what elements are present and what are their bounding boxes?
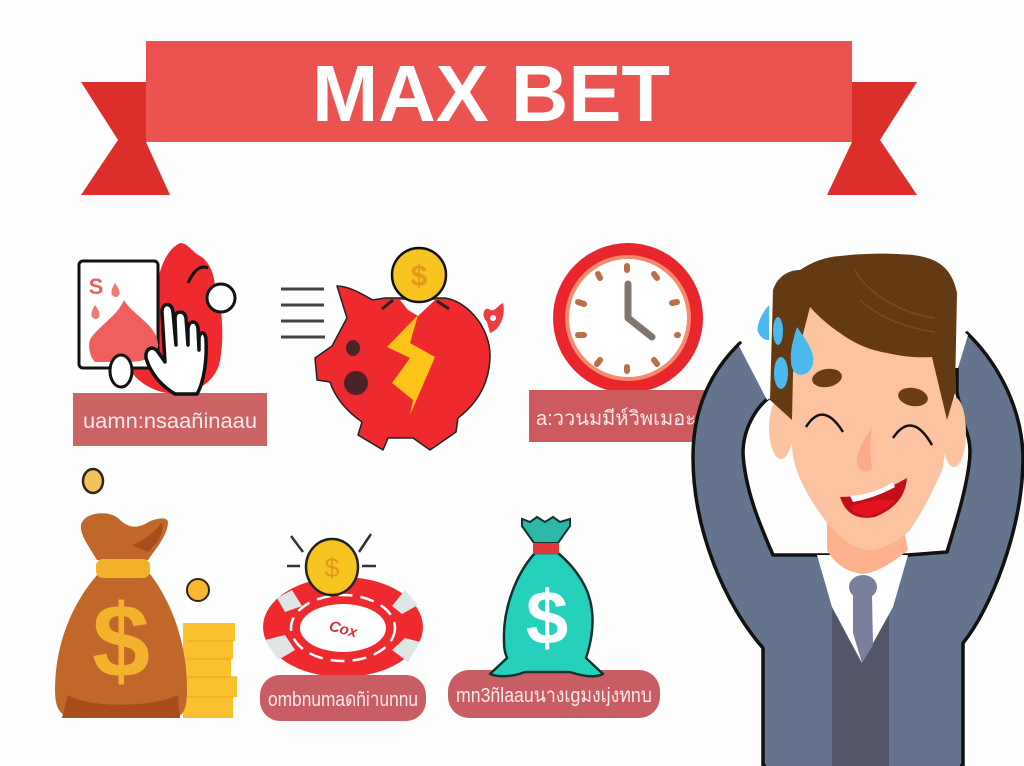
mouth bbox=[840, 478, 907, 518]
icon: broken piggy bank bbox=[315, 248, 504, 450]
label 3 bbox=[260, 675, 426, 721]
icon: clock bbox=[553, 243, 703, 393]
label 4: mn3ñlaauนางเgมงเjงทnบ bbox=[456, 685, 652, 707]
ears bbox=[769, 397, 966, 467]
icon: speed lines bbox=[281, 289, 325, 337]
icon: coin stack bbox=[183, 623, 237, 718]
title banner bbox=[81, 41, 917, 195]
label 1: uamn:nsaañinaau bbox=[83, 410, 257, 433]
icon: brown money bag with coins: $ bbox=[92, 584, 150, 700]
face bbox=[785, 300, 955, 550]
icon: gold coin bbox=[392, 248, 446, 302]
jacket and arms bbox=[693, 333, 1023, 766]
icon: teal money bag bbox=[490, 517, 603, 676]
label 4 bbox=[448, 670, 660, 718]
icon: gold coin: $ bbox=[411, 260, 428, 293]
shirt cuffs bbox=[739, 325, 968, 400]
label 2: a:ววนมมีห์วิพเมอะ bbox=[536, 407, 696, 430]
label 3: ombnumaดñiาunnu bbox=[268, 689, 418, 711]
vest bbox=[832, 607, 889, 766]
icon: brown money bag with coins bbox=[55, 469, 237, 718]
label 1 bbox=[73, 393, 267, 446]
icon: card and hand bbox=[79, 243, 235, 394]
eyebrows bbox=[811, 367, 929, 408]
hair bbox=[770, 254, 957, 420]
icon: casino chip and coin: Cox bbox=[327, 618, 360, 642]
icon: teal money bag: $ bbox=[526, 576, 568, 661]
icon: card and hand: S bbox=[89, 274, 103, 299]
title: MAX BET bbox=[312, 49, 670, 138]
illustration: stressed man bbox=[693, 254, 1023, 766]
icon: falling coin bbox=[83, 469, 103, 493]
sweat drops bbox=[757, 305, 813, 389]
icon: casino chip and coin: $ bbox=[324, 553, 340, 583]
eyes bbox=[806, 415, 932, 445]
shirt collar bbox=[817, 555, 908, 663]
icon: casino chip and coin bbox=[263, 534, 423, 677]
tie bbox=[849, 575, 877, 663]
label 2 bbox=[529, 390, 705, 442]
neck bbox=[827, 520, 908, 574]
nose bbox=[857, 427, 872, 471]
